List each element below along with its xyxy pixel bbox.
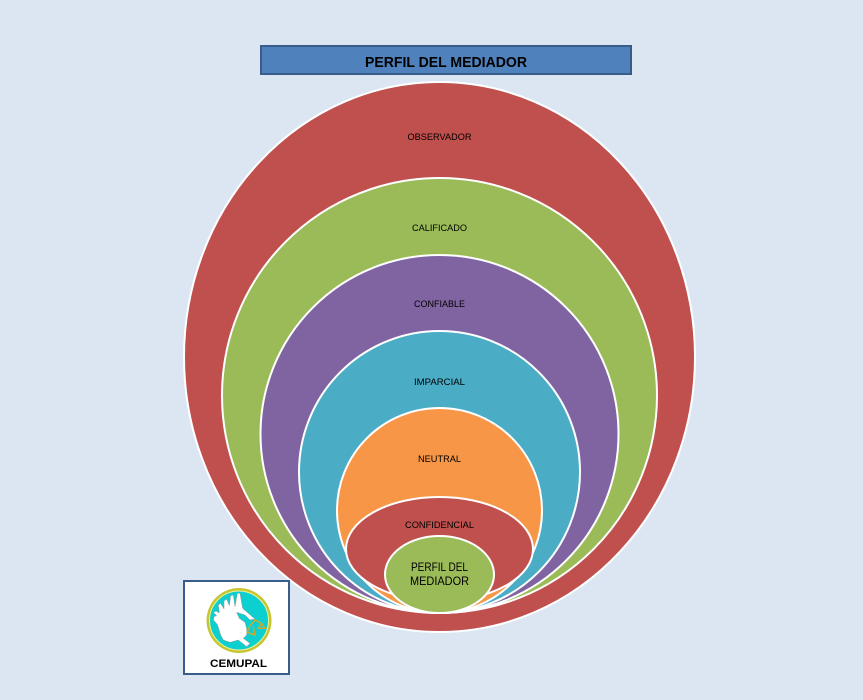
ring: imparcial: IMPARCIAL xyxy=(414,377,465,388)
ring: confiable: CONFIABLE xyxy=(414,299,465,310)
ring: observador: OBSERVADOR xyxy=(408,132,472,143)
center: perfil del mediador xyxy=(385,536,494,613)
center: perfil del mediador: PERFIL DEL xyxy=(411,562,469,574)
title bar: PERFIL DEL MEDIADOR xyxy=(365,55,527,71)
icon: hand and scales emblem xyxy=(206,588,272,653)
ring: confiable xyxy=(260,255,618,613)
ring: confidencial: CONFIDENCIAL xyxy=(405,520,474,531)
ring: neutral xyxy=(337,408,542,613)
logo: CEMUPAL xyxy=(184,581,289,674)
title bar xyxy=(261,46,631,74)
logo: CEMUPAL: CEMUPAL xyxy=(210,658,267,670)
ring: confidencial xyxy=(346,497,533,601)
center: perfil del mediador: MEDIADOR xyxy=(410,576,469,588)
ring: neutral: NEUTRAL xyxy=(418,454,461,465)
ring: calificado: CALIFICADO xyxy=(412,223,467,234)
ring: imparcial xyxy=(299,331,580,613)
nested ellipse diagram xyxy=(184,82,695,632)
